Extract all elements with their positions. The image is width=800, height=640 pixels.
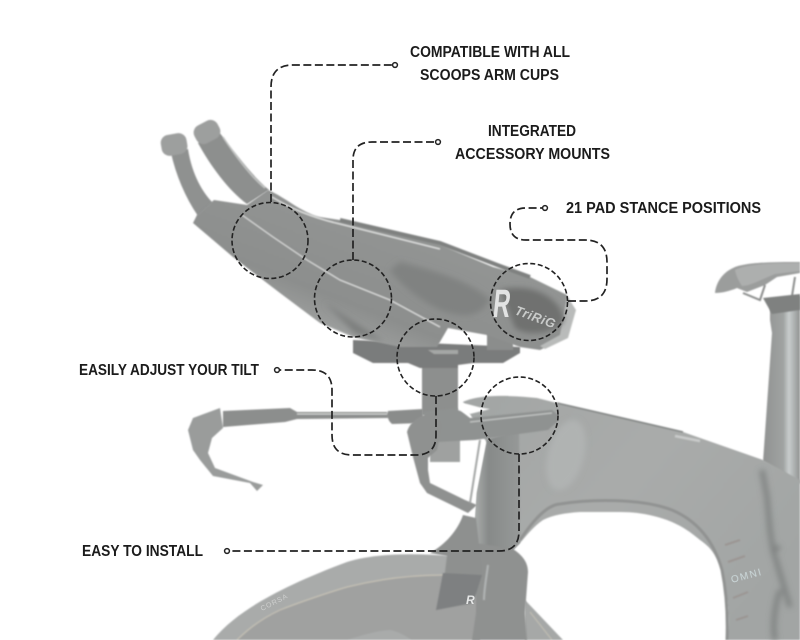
seat post [763,296,800,484]
leader line [230,454,519,551]
label: 21 PAD STANCE POSITIONS [566,200,761,217]
brand logo wordmark: TriRiG [513,303,558,331]
circle marker [314,260,392,337]
label: SCOOPS ARM CUPS [420,67,559,84]
leader dot [275,368,279,372]
leader dot [393,63,397,67]
leader dot [225,549,229,553]
leader line [271,65,392,202]
aerobar main body [193,190,576,350]
right lever and wing bar [407,403,558,513]
leader dot [436,140,440,144]
stem column and clamp plate [353,330,520,462]
label: ACCESSORY MOUNTS [455,146,610,163]
leader line [280,370,436,455]
label: EASILY ADJUST YOUR TILT [79,362,259,379]
circle marker [490,264,568,340]
leader dot [543,206,547,210]
leader line [353,142,435,260]
callout: compatible with arm cups [232,44,570,278]
saddle [715,262,800,314]
brand logo mark: R [491,281,513,325]
left brake lever and bar [188,408,423,491]
aerobar extensions [159,117,269,216]
circle marker [481,377,558,454]
label: INTEGRATED [488,123,576,140]
body tonal shading [325,262,564,342]
callout: easy to install [82,377,558,560]
callout: adjust tilt [79,319,474,455]
head tube and fork [430,430,528,640]
frame [463,396,800,640]
fork logo: R [466,593,475,607]
label: EASY TO INSTALL [82,543,203,560]
frame tonal marbling [539,416,790,640]
bike photo, faded grey [159,117,800,640]
circle marker [232,202,308,278]
leader line [510,208,607,301]
label: COMPATIBLE WITH ALL [410,44,570,61]
circle marker [397,319,474,396]
tyre lettering: CORSA [260,593,290,613]
front wheel [213,554,563,640]
callout: accessory mounts [314,123,610,337]
callout: pad stance positions [490,200,761,340]
frame model lettering: OMNI [730,567,764,586]
